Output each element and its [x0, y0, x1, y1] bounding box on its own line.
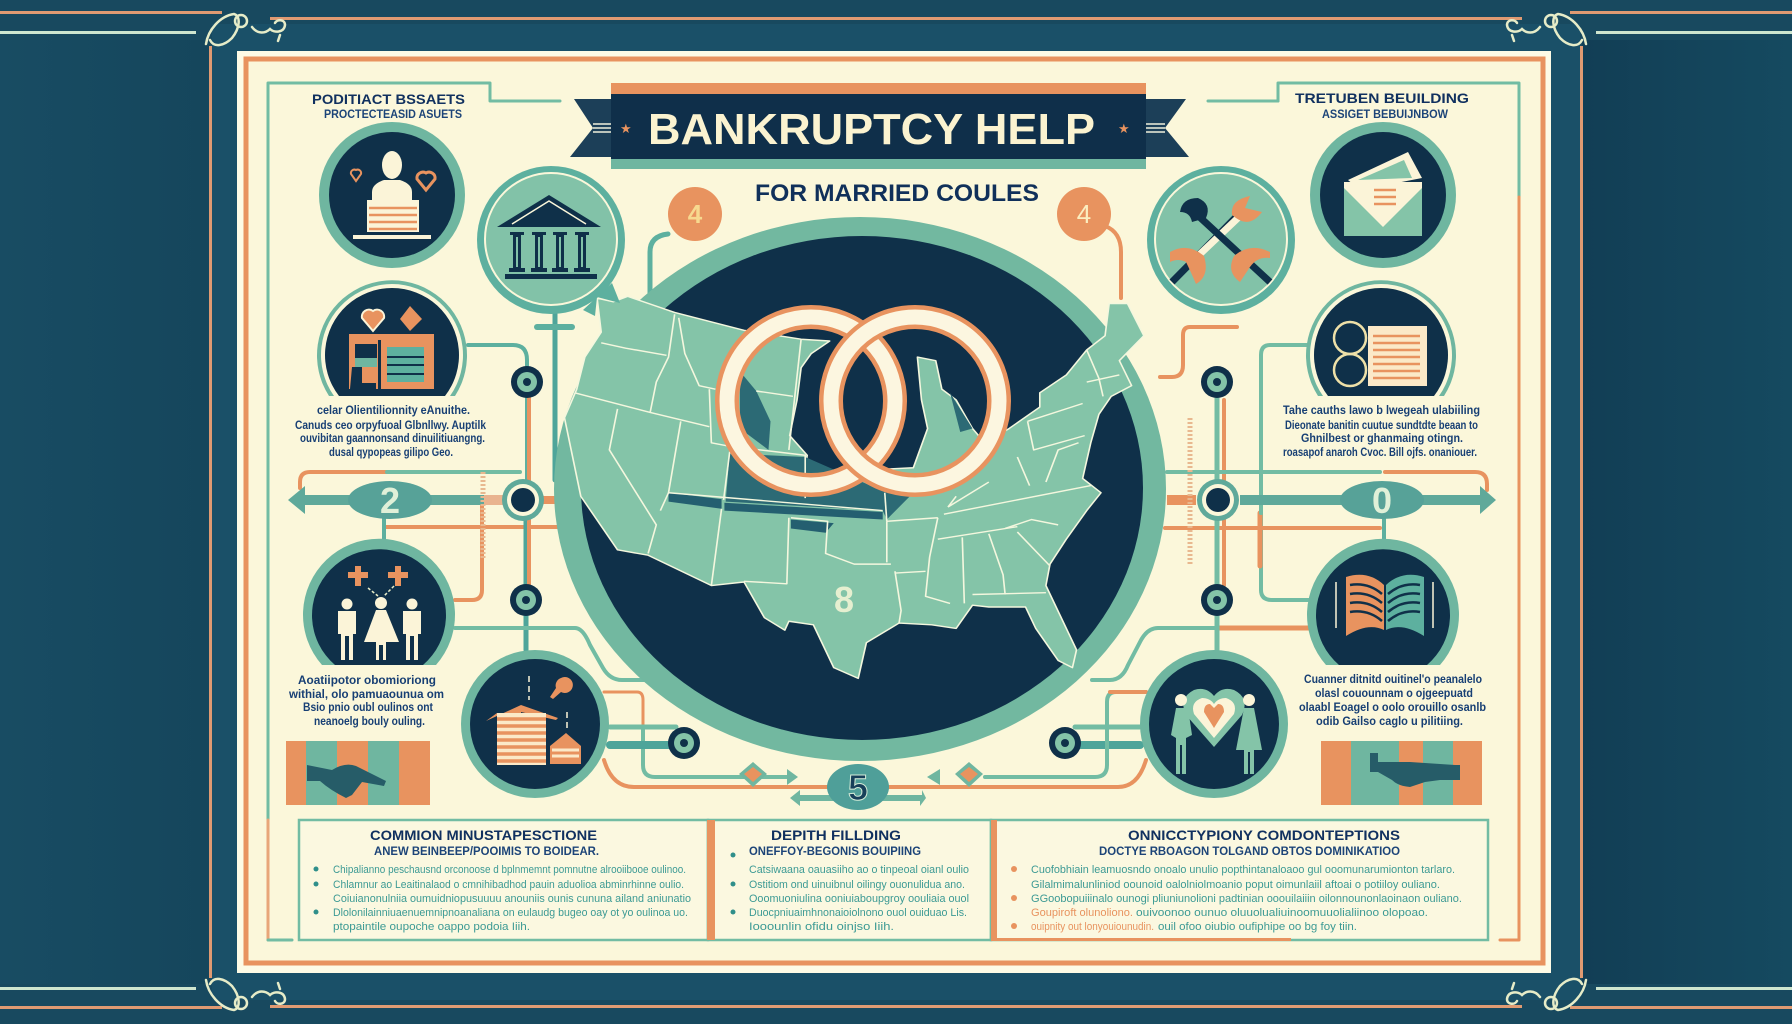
icon: two rings and document — [1306, 280, 1456, 396]
icon: open book — [1307, 539, 1459, 665]
panel: common misconceptions: Dlolonilainniuaenuemnipnoanaliana on eulaudg bugeo oay ot yo oulinoa uo. — [333, 907, 688, 919]
inner bracket frame — [268, 83, 1519, 940]
badge: number 4 left — [668, 187, 722, 241]
text: right lower description: olasl couounnam o ojgeepuatd — [1315, 686, 1473, 700]
panel: depth filling: Iooounlin ofidu oinjso Iiih. — [749, 921, 894, 933]
title banner: ★ — [1118, 121, 1130, 136]
panel: conceptions and considerations: GGoobopuiiinalo ounogi pliuniunolioni padtinian ooouilaiiin oilonnounonlaoinaon ouliano. — [1031, 893, 1462, 905]
arrow: right horizontal with number 0: 0 — [1372, 480, 1392, 521]
text: left upper description: dusal qypopeas gilipo Geo. — [329, 445, 453, 459]
panel: depth filling: Duocpniuaimhnonaioiolnono ouol ouiduao Lis. — [749, 907, 967, 919]
text: left lower description: Aoatiipotor obomioriong — [298, 673, 436, 687]
text: left upper description: celar Olientilionnity eAnuithe. — [317, 403, 470, 417]
heading: treatment building — [1295, 90, 1469, 121]
text: right lower description — [1299, 672, 1486, 728]
text: left lower description: neanoelg bouly ouling. — [314, 714, 425, 728]
panel: conceptions and considerations: DOCTYE RBOAGON TOLGAND OBTOS DOMINIKATIOO — [1099, 844, 1400, 858]
icon: hand panel right — [1321, 741, 1482, 805]
connectors — [300, 226, 1487, 787]
icon: warehouse — [461, 650, 609, 798]
icon: envelope with money — [1310, 122, 1456, 268]
arrow row with diamonds and number 5 — [739, 762, 983, 810]
central globe ring — [554, 217, 1166, 761]
icon: hand panel left — [286, 741, 430, 805]
text: right lower description: olaabl Eoagel o oolo orouillo osanlb — [1299, 700, 1486, 714]
panel: common misconceptions: ptopaintile oupoche oappo podoia Iiih. — [333, 921, 530, 933]
heading: treatment building: ASSIGET BEBUIJNBOW — [1322, 107, 1449, 121]
map of the United States — [564, 296, 1144, 678]
title banner: BANKRUPTCY HELP — [648, 105, 1095, 154]
text: left upper description: Canuds ceo orpyfuoal Glbnllwy. Auptilk — [295, 418, 486, 432]
panel: conceptions and considerations: ouil ofoo oiubio oufiphipe oo bg foy tiin. — [1158, 921, 1357, 933]
small connector nodes — [502, 366, 1239, 759]
map marker number 8: 8 — [834, 579, 854, 620]
icon: person at podium — [319, 122, 465, 268]
text: left lower description: Bsio pnio oubl oulinos ont — [303, 700, 433, 714]
icon: courthouse — [477, 166, 625, 316]
panel: common misconceptions — [299, 820, 708, 940]
panel: depth filling: Ostitiom ond uinuibnul oilingy ouonulidua ano. — [749, 879, 965, 891]
panel: common misconceptions: Chipalianno peschausnd orconoose d bplnmemnt pomnutne alrooiibooe oulinoo. — [333, 864, 686, 876]
heading: protected assets: PODITIACT BSSAETS — [312, 91, 465, 107]
heading: protected assets: PROCTECTEASID ASUETS — [324, 107, 462, 121]
title banner — [570, 83, 1189, 169]
icon: family of three — [303, 539, 455, 665]
heading: treatment building: TRETUBEN BEUILDING — [1295, 90, 1469, 106]
text: right lower description: Cuanner ditnitd ouitinel'o peanalelo — [1304, 672, 1482, 686]
paper panel — [237, 51, 1551, 973]
badge: number 4 left: 4 — [688, 199, 703, 229]
text: left upper description: ouvibitan gaannonsand dinuilitiuangng. — [300, 431, 485, 445]
panel: conceptions and considerations — [991, 820, 1488, 941]
panel: depth filling: Catsiwaana oauasiiho ao o tinpeoal oianl oulio — [749, 864, 969, 876]
panel: common misconceptions: Coiuianonulniia oumuidniopusuuuu anouniis ounis cununa ailand aniunatio — [333, 893, 691, 905]
panel: depth filling — [707, 820, 991, 940]
panel: common misconceptions: COMMION MINUSTAPESCTIONE — [370, 827, 597, 843]
text: right upper description: roasapof anaroh Cvoc. Bill ojfs. onaniouer. — [1283, 445, 1477, 459]
icon: documents and hearts — [317, 280, 467, 396]
text: left lower description: withial, olo pamuaounua om — [288, 687, 444, 701]
panel: common misconceptions: Chlamnur ao Leaitinalaod o cmnihibadhod pauin aduolioa abminrhinne oulio. — [333, 879, 684, 891]
badge: number 4 right — [1057, 187, 1111, 241]
panel: conceptions and considerations: ouivoonoo ounuo oluuolualiuinoomuuolialiinoo olopoao. — [1136, 907, 1428, 919]
panel: conceptions and considerations: ouipnity out lonyouiounudin. — [1031, 921, 1154, 933]
text: right upper description: Ghnilbest or ghanmaing otingn. — [1301, 431, 1463, 445]
badge: number 4 right: 4 — [1077, 199, 1091, 229]
subtitle: FOR MARRIED COULES — [755, 180, 1039, 207]
panel: conceptions and considerations: Cuofobhiain leamuosndo onoalo unulio popthintanaloaoo gul ooomunarumionton tarlaro. — [1031, 864, 1455, 876]
text: right upper description: Tahe cauths lawo b lwegeah ulabiiling — [1283, 403, 1480, 417]
panel: conceptions and considerations: ONNICCTYPIONY COMDONTEPTIONS — [1128, 827, 1400, 843]
panel: common misconceptions: ANEW BEINBEEP/POOIMIS TO BOIDEAR. — [374, 844, 599, 858]
icon: couple with heart — [1140, 650, 1288, 798]
text: right lower description: odib Gailso caglo u pilitiing. — [1316, 714, 1463, 728]
panel: conceptions and considerations: Goupiroft olunoliono. — [1031, 907, 1133, 919]
arrow: left horizontal with number 2: 2 — [380, 480, 400, 521]
text: right upper description: Dieonate banitin cuutue sundtdte beaan to — [1285, 418, 1478, 432]
panel: depth filling: Ooomuoniulina ooniuiaboupgroy oouliaia ouol — [749, 893, 969, 905]
text: right upper description — [1283, 403, 1480, 459]
arrow: right horizontal with number 0 — [483, 418, 1496, 565]
corner ornaments — [206, 14, 1586, 1010]
wedding rings — [727, 317, 999, 485]
text: left upper description — [295, 403, 486, 459]
title banner: ★ — [620, 121, 632, 136]
arrow row with diamonds and number 5: 5 — [848, 767, 868, 808]
panel: depth filling: ONEFFOY-BEGONIS BOUIPIING — [749, 844, 921, 858]
heading: protected assets — [312, 91, 465, 121]
arrow: left horizontal with number 2 — [288, 480, 556, 521]
panel: depth filling: DEPITH FILLDING — [771, 827, 901, 843]
panel: conceptions and considerations: Gilalmimalunliniod oounoid oalolniolmoanio poput oimunlaiil aftoai o potiiloy ouliano. — [1031, 879, 1440, 891]
text: left lower description — [288, 673, 444, 728]
icon: tools — [1147, 166, 1295, 314]
